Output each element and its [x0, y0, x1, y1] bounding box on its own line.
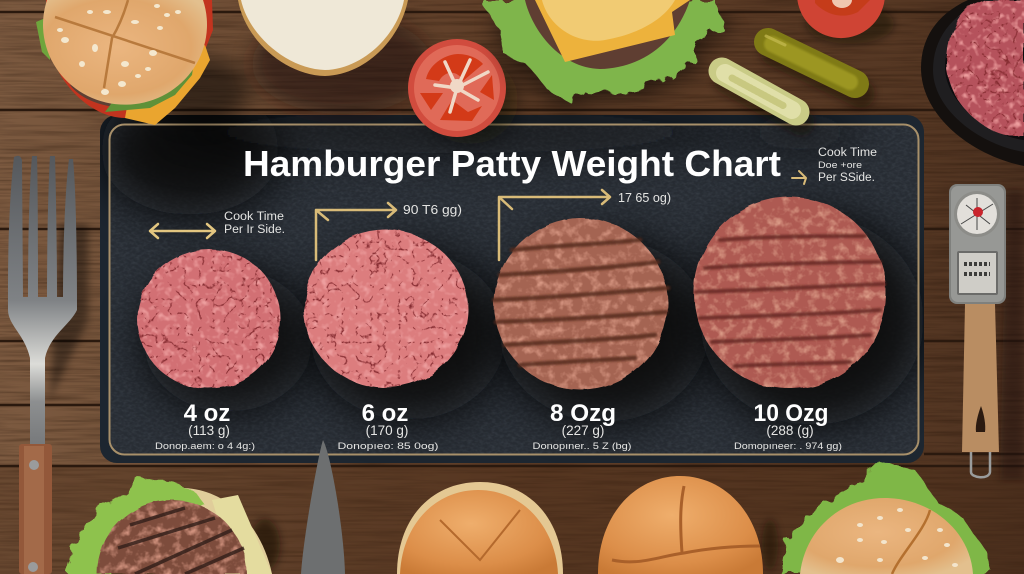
icon: whole pickle	[766, 36, 861, 94]
arrow: small title arrow	[792, 171, 806, 184]
patty: 10 oz grilled	[694, 197, 886, 389]
label: 10 oz: (288 (g)	[766, 423, 814, 438]
label: 8 oz	[532, 400, 632, 452]
icon: fork wooden handle	[19, 444, 52, 574]
icon: tomato slice center	[408, 39, 518, 144]
icon: bread slice	[238, 0, 432, 114]
text: cook time note right: Per SSide.	[818, 172, 875, 184]
text: cook time note right	[818, 147, 877, 184]
label: 6 oz: (170 g)	[366, 423, 408, 438]
patty: 6 oz raw	[304, 230, 468, 388]
text: cook time note left: Cook Time	[224, 211, 284, 223]
icon: black plate with raw patty	[921, 0, 1024, 166]
label: 8 oz: Donopıner.. 5 Z (bg)	[532, 441, 632, 452]
text: 6 oz arrow label: 90 T6 gg)	[403, 202, 462, 217]
label: 6 oz	[338, 400, 438, 452]
arrow: 6 oz bracket	[316, 203, 396, 260]
label: 8 oz: 8 Ozg	[550, 400, 616, 427]
text: cook time note right: Cook Time	[818, 147, 877, 159]
icon: burger bottom left	[68, 477, 280, 574]
label: 6 oz: 6 oz	[362, 400, 408, 427]
text: cook time note left: Per Ir Side.	[224, 224, 285, 236]
icon: thermometer	[949, 184, 1024, 480]
icon: knife	[301, 440, 345, 574]
label: 4 oz: Donop.aem: o 4 4g:)	[155, 441, 255, 452]
label: 10 oz	[734, 400, 842, 452]
label: 8 oz: (227 g)	[562, 423, 604, 438]
icon: sliced pickle	[722, 71, 801, 122]
label: 6 oz: Donopıeo: 85 0og)	[338, 441, 438, 452]
title: Hamburger Patty Weight Chart	[243, 143, 781, 184]
icon: cheeseburger with lettuce top	[484, 0, 734, 112]
label: 10 oz: 10 Ozg	[754, 400, 828, 427]
text: cook time note right: Doe +ore	[818, 160, 862, 170]
text: 8 oz arrow label: 17 65 og)	[618, 191, 671, 205]
label: 4 oz: 4 oz	[184, 400, 230, 427]
arrow: 8 oz bracket	[499, 190, 610, 260]
text: cook time note left	[224, 211, 285, 236]
icon: plain bun bottom right	[598, 476, 778, 574]
arrow: double arrow over 4 oz	[150, 224, 215, 238]
icon: sesame burger bottom right	[780, 462, 995, 574]
label: 10 oz: Domopıneer: . 974 gg)	[734, 441, 842, 452]
panel: slate chart board	[100, 85, 924, 463]
label: 4 oz	[155, 400, 255, 452]
icon: plain bun bottom center	[397, 482, 563, 574]
icon: fork	[8, 156, 88, 445]
patty: 4 oz raw	[137, 249, 281, 389]
label: 4 oz: (113 g)	[188, 423, 230, 438]
icon: tomato slice top right	[797, 0, 894, 44]
icon: sesame burger top left	[36, 0, 250, 125]
patty: 8 oz grilled	[494, 218, 668, 390]
